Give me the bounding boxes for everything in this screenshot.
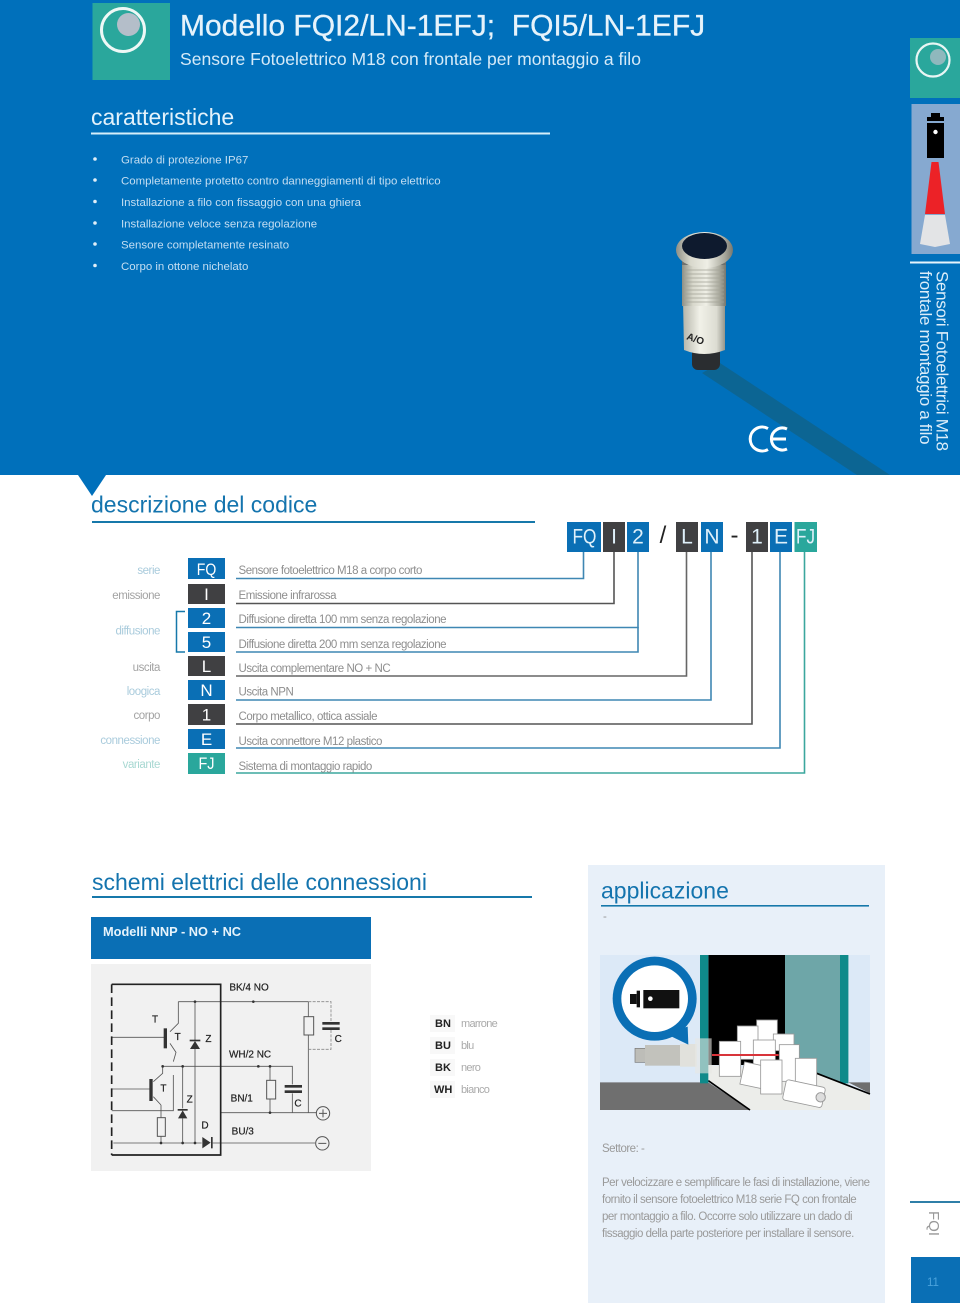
code legend boxes: 1	[202, 706, 211, 724]
code legend boxes: N	[200, 681, 213, 700]
feature list: Corpo in ottone nichelato	[121, 261, 248, 273]
application text: fissaggio della parte posteriore per installare il sensore.	[602, 1228, 854, 1240]
application text: fornito il sensore fotoelettrico M18 serie FQ con frontale	[602, 1194, 856, 1206]
code legend boxes: 2	[202, 609, 211, 628]
diffusione bracket	[176, 612, 185, 652]
application illustration	[600, 955, 870, 1110]
application text: per montaggio a filo. Occorre solo utilizzare un dado di	[602, 1211, 852, 1223]
model code boxes: -	[730, 522, 738, 549]
code connector lines	[236, 552, 804, 773]
wiring diagram panel: T	[160, 1084, 166, 1095]
application dash: -	[603, 911, 607, 923]
heading: applicazione: applicazione	[601, 878, 729, 904]
code descriptions: Diffusione diretta 200 mm senza regolazione	[238, 639, 446, 651]
code descriptions	[238, 565, 446, 773]
wiring diagram panel: D	[201, 1121, 209, 1132]
side vertical title: Sensori Fotoelettrici M18	[932, 271, 952, 451]
code legend boxes: FJ	[198, 754, 214, 773]
side tab: sensing diagram	[912, 104, 960, 254]
code descriptions: Uscita complementare NO + NC	[238, 663, 390, 675]
code legend boxes: FQ	[197, 560, 216, 579]
wiring diagram panel: Z	[187, 1095, 193, 1106]
code descriptions: Uscita NPN	[238, 686, 293, 698]
code descriptions: Corpo metallico, ottica assiale	[238, 711, 377, 723]
wire colour legend: nero	[461, 1062, 481, 1074]
product photo: sensor: A/O	[685, 331, 706, 348]
wiring diagram panel	[91, 964, 371, 1171]
wiring diagram panel: T	[175, 1032, 181, 1043]
model code boxes: L	[681, 526, 693, 548]
model code boxes: FQ	[572, 526, 596, 548]
page number box	[911, 1257, 960, 1303]
code legend boxes: L	[202, 657, 211, 676]
icon: CE mark	[750, 427, 787, 451]
wiring diagram panel: Z	[205, 1034, 211, 1045]
model code boxes: E	[774, 526, 788, 548]
application text	[602, 1177, 870, 1240]
code field labels: connessione	[100, 735, 160, 747]
model code boxes: 2	[632, 526, 644, 548]
feature list: Completamente protetto contro danneggiamenti di tipo elettrico	[121, 176, 441, 188]
wiring diagram panel: BK/4 NO	[229, 983, 269, 994]
code descriptions: Uscita connettore M12 plastico	[238, 736, 382, 748]
code legend boxes: 5	[202, 633, 211, 652]
side vertical title: frontale montaggio a filo	[916, 271, 935, 444]
code legend boxes: I	[204, 585, 209, 604]
heading: descrizione del codice: descrizione del codice	[91, 492, 317, 518]
wire colour legend	[430, 1015, 498, 1098]
feature list: Installazione a filo con fissaggio con una ghiera	[121, 197, 362, 209]
code descriptions: Sensore fotoelettrico M18 a corpo corto	[238, 565, 422, 577]
feature list: Sensore completamente resinato	[121, 240, 289, 252]
feature list: Grado di protezione IP67	[121, 154, 248, 166]
wire colour legend: blu	[461, 1040, 474, 1052]
page number box: 11	[927, 1277, 939, 1289]
application text: Per velocizzare e semplificare le fasi di installazione, viene	[602, 1177, 870, 1189]
code field labels: variante	[123, 759, 160, 771]
wiring diagram panel: BU/3	[232, 1127, 254, 1138]
feature list: Installazione veloce senza regolazione	[121, 218, 317, 230]
sector label: Settore: -	[602, 1143, 645, 1155]
model code boxes: I	[611, 526, 617, 548]
wire colour legend: bianco	[461, 1084, 490, 1096]
code descriptions: Diffusione diretta 100 mm senza regolazione	[238, 614, 446, 626]
wiring diagram panel: C	[335, 1034, 342, 1045]
code legend boxes	[188, 558, 225, 774]
code descriptions: Emissione infrarossa	[238, 590, 337, 602]
title: Modello FQI2/LN-1EFJ; FQI5/LN-1EFJ	[180, 10, 705, 42]
model code boxes: FJ	[796, 526, 815, 548]
code field labels: serie	[137, 565, 160, 577]
heading: schemi elettrici: schemi elettrici delle connessioni	[92, 869, 427, 895]
wire colour legend: BK	[435, 1062, 451, 1074]
wire colour legend: BN	[435, 1018, 451, 1030]
side rule	[910, 262, 960, 264]
wiring diagram panel: C	[294, 1098, 302, 1109]
subtitle: Sensore Fotoelettrico M18 con frontale per montaggio a filo	[180, 49, 641, 69]
panel: applicazione	[588, 865, 885, 1303]
code legend boxes: E	[201, 730, 212, 749]
model bar	[91, 917, 371, 959]
wire colour legend: BU	[435, 1040, 451, 1052]
icon: teal sensor front	[92, 3, 170, 80]
model bar: Modelli NNP - NO + NC	[103, 924, 241, 939]
side tab: teal icon	[910, 38, 960, 98]
top blue header panel	[0, 0, 960, 496]
heading: caratteristiche: caratteristiche	[91, 104, 234, 130]
sensor shadow	[702, 363, 890, 475]
model code boxes: /	[660, 522, 667, 549]
footer tab rule	[910, 1201, 960, 1203]
code descriptions: Sistema di montaggio rapido	[238, 761, 372, 773]
footer series label: FQI	[925, 1211, 942, 1236]
wiring diagram panel: WH/2 NC	[229, 1049, 271, 1060]
code field labels: corpo	[133, 710, 160, 722]
code field labels: emissione	[112, 590, 160, 602]
side vertical title	[916, 271, 952, 451]
model code boxes: 1	[751, 526, 763, 548]
code field labels: diffusione	[115, 626, 160, 638]
wire colour legend: WH	[434, 1084, 452, 1096]
code field labels: loogica	[127, 686, 161, 698]
code field labels	[100, 565, 161, 771]
wiring diagram panel: BN/1	[231, 1093, 253, 1104]
code field labels: uscita	[133, 662, 161, 674]
wire colour legend: marrone	[461, 1018, 498, 1030]
model code boxes	[567, 522, 817, 552]
product photo: sensor	[676, 232, 733, 370]
wiring diagram panel: T	[152, 1014, 158, 1025]
model code boxes: N	[704, 526, 720, 548]
feature list	[93, 154, 441, 273]
